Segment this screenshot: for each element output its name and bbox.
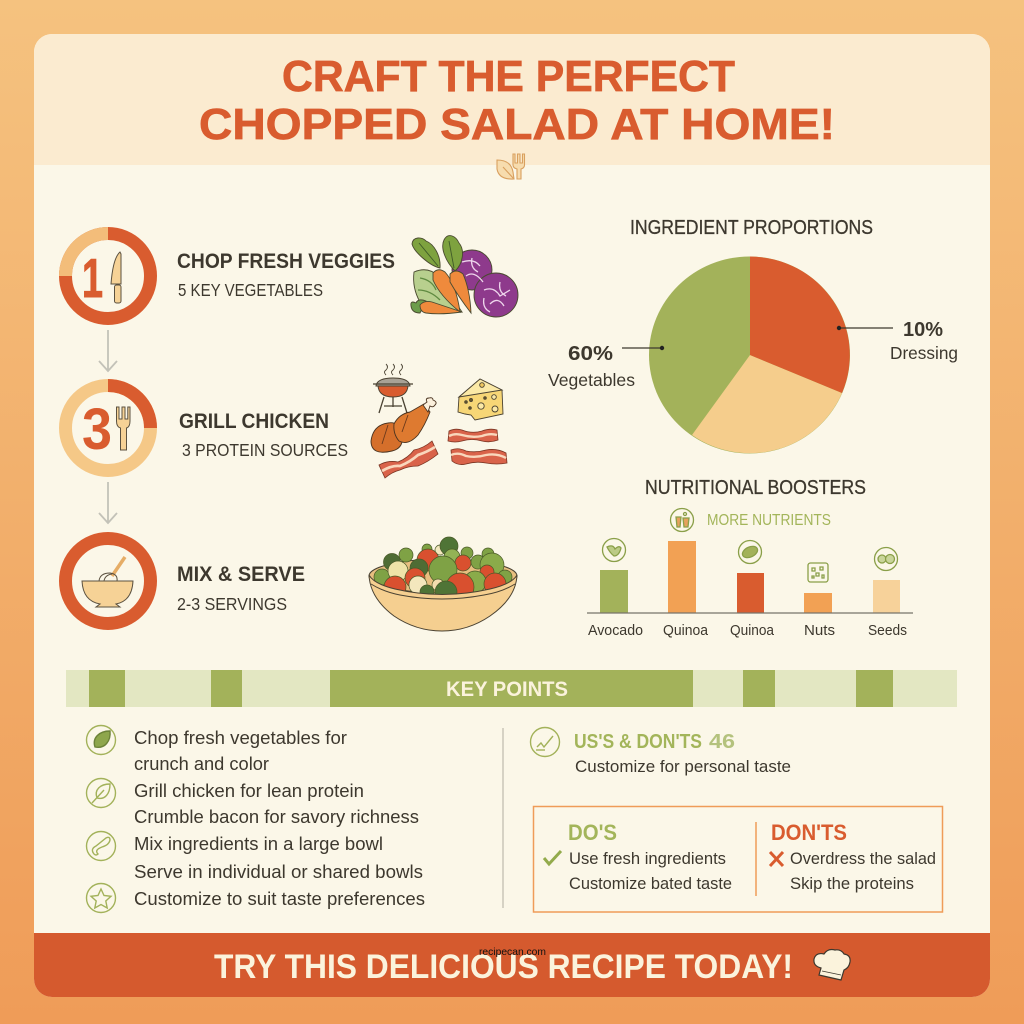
pie label: vegetables xyxy=(548,343,664,390)
step 2 number and fork: 3 xyxy=(82,397,112,462)
icon: outlined leaf xyxy=(86,778,116,808)
key points list: Customize to suit taste preferences xyxy=(134,888,425,909)
key points banner: KEY POINTS xyxy=(446,678,568,701)
do's column: DO'S xyxy=(568,820,617,845)
bar chart xyxy=(587,541,913,639)
do's column: Customize bated taste xyxy=(569,875,732,893)
don'ts column: Skip the proteins xyxy=(790,875,914,893)
bar chart: Avocado xyxy=(588,623,643,639)
icon: grill xyxy=(373,364,413,413)
bar chart: Quinoa xyxy=(663,623,709,639)
step 1 text: CHOP FRESH VEGGIES xyxy=(177,250,395,273)
icon: leaf and fork xyxy=(497,154,524,179)
chart title: ingredient proportions: INGREDIENT PROPORTIONS xyxy=(630,217,873,239)
step 1 number and knife: 1 xyxy=(82,247,103,309)
step 1 ring xyxy=(66,234,150,318)
bar chart: Seeds xyxy=(868,623,907,639)
icon: quinoa xyxy=(738,540,762,564)
key points list: Grill chicken for lean protein xyxy=(134,780,364,801)
icon: star xyxy=(86,884,116,912)
key points list: Mix ingredients in a large bowl xyxy=(134,833,383,854)
icon: chicken xyxy=(371,398,436,452)
bar chart: Nuts xyxy=(804,623,835,639)
do's column: Use fresh ingredients xyxy=(569,850,726,868)
key points list: Chop fresh vegetables for xyxy=(134,727,347,748)
icon: more nutrients xyxy=(670,508,694,532)
chart title: nutritional boosters: NUTRITIONAL BOOSTERS xyxy=(645,477,866,499)
legend: more nutrients: MORE NUTRIENTS xyxy=(707,512,831,529)
pie label: dressing: 10% xyxy=(903,319,943,341)
icon: nuts xyxy=(808,563,828,582)
column divider xyxy=(502,728,504,908)
key points list: Serve in individual or shared bowls xyxy=(134,861,423,882)
step 1 text: 5 KEY VEGETABLES xyxy=(178,280,323,300)
step 3 bowl and whisk xyxy=(82,557,133,607)
don'ts column: Overdress the salad xyxy=(790,850,936,868)
us's and don'ts heading: US'S & DON'TS xyxy=(574,731,702,753)
pie chart xyxy=(649,256,850,454)
key points list: crunch and color xyxy=(134,753,269,774)
step 3 ring xyxy=(66,538,150,624)
step 2 text: 3 PROTEIN SOURCES xyxy=(182,440,348,460)
watermark: recipecan.com xyxy=(479,946,546,958)
step 2 number and fork xyxy=(82,397,130,462)
footer banner xyxy=(34,933,990,997)
arrow: step 1 to step 2 xyxy=(99,330,117,371)
key points list: Crumble bacon for savory richness xyxy=(134,806,419,827)
key points list xyxy=(134,727,425,909)
arrow: step 2 to step 3 xyxy=(99,482,117,523)
icon: check badge xyxy=(530,728,560,756)
us's and don'ts heading xyxy=(574,731,791,776)
pie label: dressing: Dressing xyxy=(890,343,958,363)
icon: chef hat xyxy=(814,950,850,980)
step 2 ring xyxy=(66,386,150,470)
pie label: dressing xyxy=(837,319,958,363)
step 3 text xyxy=(177,563,305,614)
icon: vegetables xyxy=(411,236,518,317)
icon: cheese xyxy=(458,379,503,420)
step 2 text: GRILL CHICKEN xyxy=(179,410,329,433)
key points banner xyxy=(66,670,957,707)
step 3 text: 2-3 SERVINGS xyxy=(177,594,287,614)
do's column xyxy=(544,820,732,893)
don'ts column xyxy=(770,820,936,893)
bar chart: Quinoa xyxy=(730,623,775,639)
title xyxy=(199,52,835,149)
icon: seeds xyxy=(874,548,898,570)
icon: salad bowl xyxy=(369,537,517,631)
pie label: vegetables: 60% xyxy=(568,343,613,365)
icon: bacon xyxy=(379,429,507,478)
pie label: vegetables: Vegetables xyxy=(548,370,635,390)
footer banner: TRY THIS DELICIOUS RECIPE TODAY! xyxy=(214,948,793,986)
icon: filled leaf xyxy=(86,726,116,754)
step 2 text xyxy=(179,410,348,460)
do's and don'ts box xyxy=(534,806,942,912)
step 1 text xyxy=(177,250,395,300)
don'ts column: DON'TS xyxy=(771,820,847,845)
title: CRAFT THE PERFECT xyxy=(282,52,735,101)
icon: avocado xyxy=(602,538,626,562)
title: CHOPPED SALAD AT HOME! xyxy=(199,100,835,149)
step 3 text: MIX & SERVE xyxy=(177,563,305,586)
icon: whisk loop xyxy=(86,832,116,860)
us's and don'ts heading: Customize for personal taste xyxy=(575,757,791,776)
us's and don'ts heading: 46 xyxy=(709,731,735,753)
